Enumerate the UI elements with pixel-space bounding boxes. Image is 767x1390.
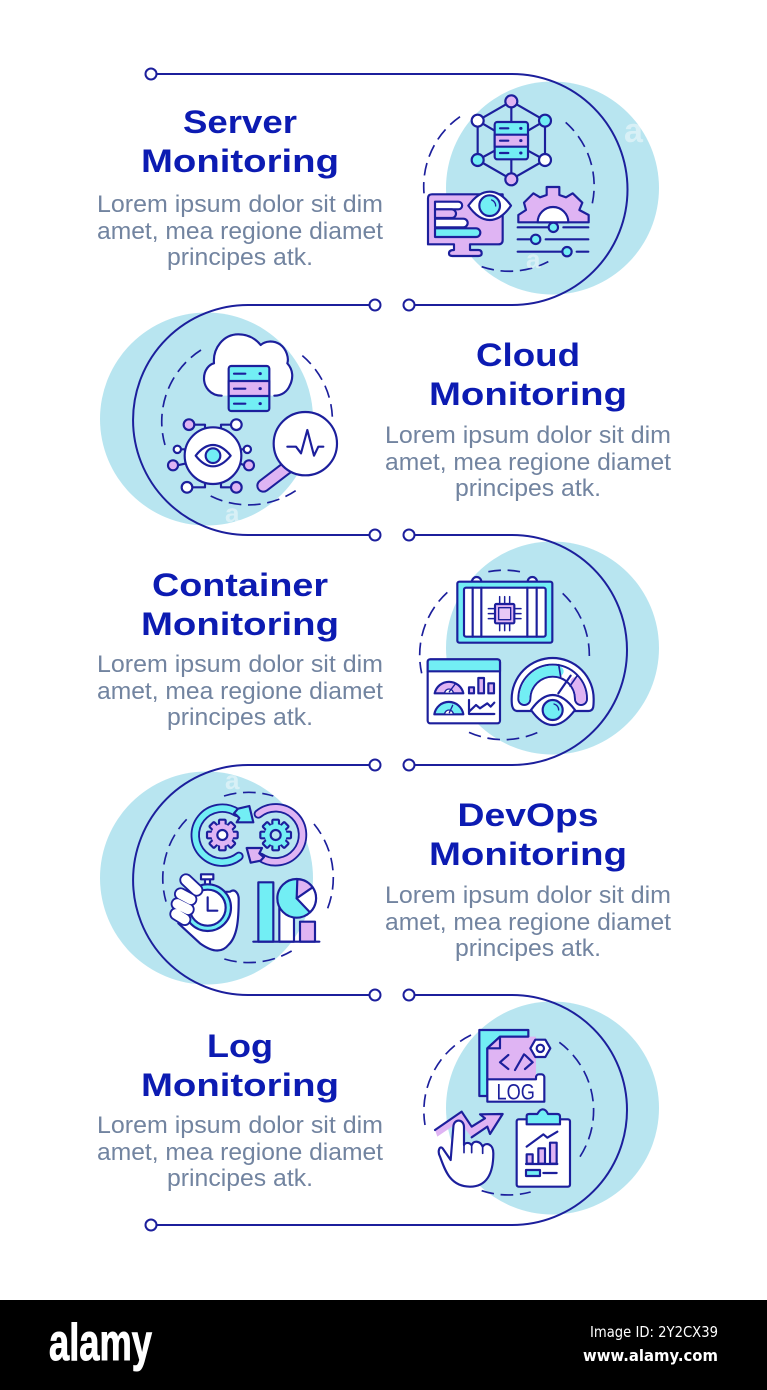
end dot (404, 300, 414, 310)
panel: log monitoring (97, 990, 659, 1230)
heading: Monitoring (141, 1067, 339, 1103)
icon: devops cycle, stopwatch hand, charts (163, 792, 333, 963)
text block: principes atk. (167, 244, 313, 271)
heading: Monitoring (429, 376, 627, 412)
text block (385, 882, 671, 962)
text block: Lorem ipsum dolor sit dim (97, 651, 383, 678)
bottom dot (370, 990, 380, 1000)
heading (141, 567, 339, 642)
bottom dot (404, 760, 414, 770)
top dot (370, 760, 380, 770)
top dot (404, 530, 414, 540)
watermark: a (624, 112, 644, 150)
text block: principes atk. (167, 1165, 313, 1192)
heading (429, 797, 627, 872)
top dot (404, 990, 414, 1000)
background circle (446, 1002, 659, 1214)
icon: server network, monitor eye, gear (424, 95, 594, 271)
text block: amet, mea regione diamet (385, 449, 671, 476)
text block: Lorem ipsum dolor sit dim (97, 191, 383, 218)
text block: Lorem ipsum dolor sit dim (385, 882, 671, 909)
heading: Monitoring (141, 143, 339, 179)
text block (97, 191, 383, 271)
text block (97, 651, 383, 731)
icon: log file, pointing hand, clipboard report (424, 1030, 594, 1195)
text block (385, 422, 671, 502)
text block (97, 1112, 383, 1192)
text block: principes atk. (167, 704, 313, 731)
panel: cloud monitoring (100, 300, 671, 540)
heading: Cloud (476, 337, 580, 373)
website: www.alamy.com (583, 1346, 718, 1365)
text block: Lorem ipsum dolor sit dim (385, 422, 671, 449)
connector line (415, 535, 627, 765)
connector line (157, 74, 628, 305)
panel: server monitoring (97, 68, 659, 310)
connector line (133, 765, 369, 995)
heading: Container (152, 567, 328, 603)
heading: Log (207, 1028, 273, 1064)
background circle (100, 772, 313, 984)
icon: log file, pointing hand, clipboard report: LOG (496, 1079, 535, 1104)
text block: amet, mea regione diamet (97, 218, 383, 245)
text block: amet, mea regione diamet (97, 678, 383, 705)
logo: alamy (49, 1314, 152, 1372)
icon: cloud server, eye network, magnifier (162, 334, 337, 505)
background circle (446, 82, 659, 294)
text block: Lorem ipsum dolor sit dim (97, 1112, 383, 1139)
text block: amet, mea regione diamet (385, 909, 671, 936)
background circle (446, 542, 659, 754)
heading: DevOps (458, 797, 598, 833)
heading: Monitoring (141, 606, 339, 642)
heading (429, 337, 627, 412)
heading: Monitoring (429, 836, 627, 872)
panel: devops monitoring (100, 760, 671, 1000)
heading (141, 1028, 339, 1103)
background circle (100, 312, 313, 526)
text block: amet, mea regione diamet (97, 1139, 383, 1166)
heading: Server (183, 104, 297, 140)
watermark: a (225, 498, 240, 528)
end dot (146, 1220, 156, 1230)
connector line (133, 305, 369, 535)
heading (141, 104, 339, 179)
top dot (370, 300, 380, 310)
watermark: a (225, 765, 240, 795)
text block: principes atk. (455, 475, 601, 502)
watermark: a (526, 244, 541, 274)
start dot (146, 68, 156, 80)
bottom dot (370, 530, 380, 540)
panel: container monitoring (97, 530, 659, 770)
footer bar (0, 1300, 767, 1390)
connector line (157, 995, 627, 1225)
text block: principes atk. (455, 935, 601, 962)
image id: Image ID: 2Y2CX39 (590, 1323, 718, 1341)
icon: container chip, dashboard, gauge eye (420, 570, 594, 740)
